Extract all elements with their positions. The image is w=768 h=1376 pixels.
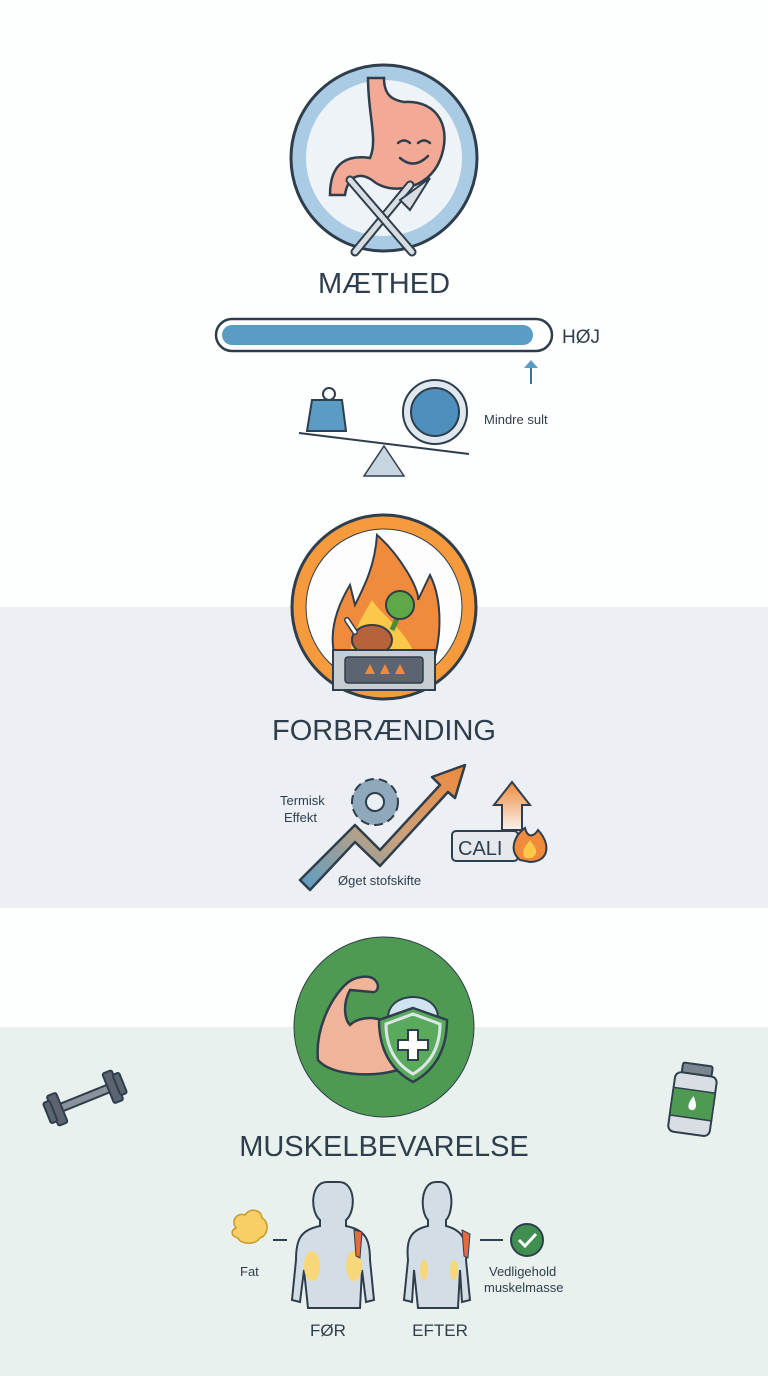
- icon: seesaw balance: [299, 380, 469, 476]
- label: Fat: Fat: [240, 1264, 259, 1279]
- icon: stomach circle: [291, 65, 477, 252]
- icon: dumbbell: [41, 1068, 129, 1128]
- icon: supplement bottle: [667, 1062, 719, 1137]
- progress bar: [216, 319, 552, 351]
- figure: before: [292, 1182, 374, 1308]
- label: Vedligehold muskelmasse: muskelmasse: [484, 1280, 563, 1295]
- arrow up: [524, 360, 538, 384]
- icon: gear: [352, 779, 398, 825]
- icon: CALI with flame: [452, 782, 546, 862]
- title: FORBRÆNDING: FORBRÆNDING: [272, 715, 496, 747]
- figure: after: [404, 1182, 470, 1308]
- label: EFTER: EFTER: [412, 1321, 468, 1340]
- title: MÆTHED: MÆTHED: [318, 268, 450, 300]
- label: Mindre sult: Mindre sult: [484, 412, 548, 427]
- icon: muscle shield circle: [294, 937, 474, 1117]
- icon: fat blob: [232, 1210, 267, 1243]
- title: MUSKELBEVARELSE: MUSKELBEVARELSE: [239, 1131, 529, 1163]
- label: FØR: FØR: [310, 1321, 346, 1340]
- label: Vedligehold muskelmasse: Vedligehold: [489, 1264, 556, 1279]
- label: Øget stofskifte: Øget stofskifte: [338, 873, 421, 888]
- label: Termisk Effekt: Effekt: [284, 810, 317, 825]
- icon: CALI with flame: CALI: [458, 838, 502, 860]
- label: Termisk Effekt: Termisk: [280, 793, 325, 808]
- arrow: rising trend: [300, 765, 465, 890]
- label: HØJ: HØJ: [562, 327, 600, 348]
- icon: check: [511, 1224, 543, 1256]
- icon: fire circle: [292, 515, 476, 699]
